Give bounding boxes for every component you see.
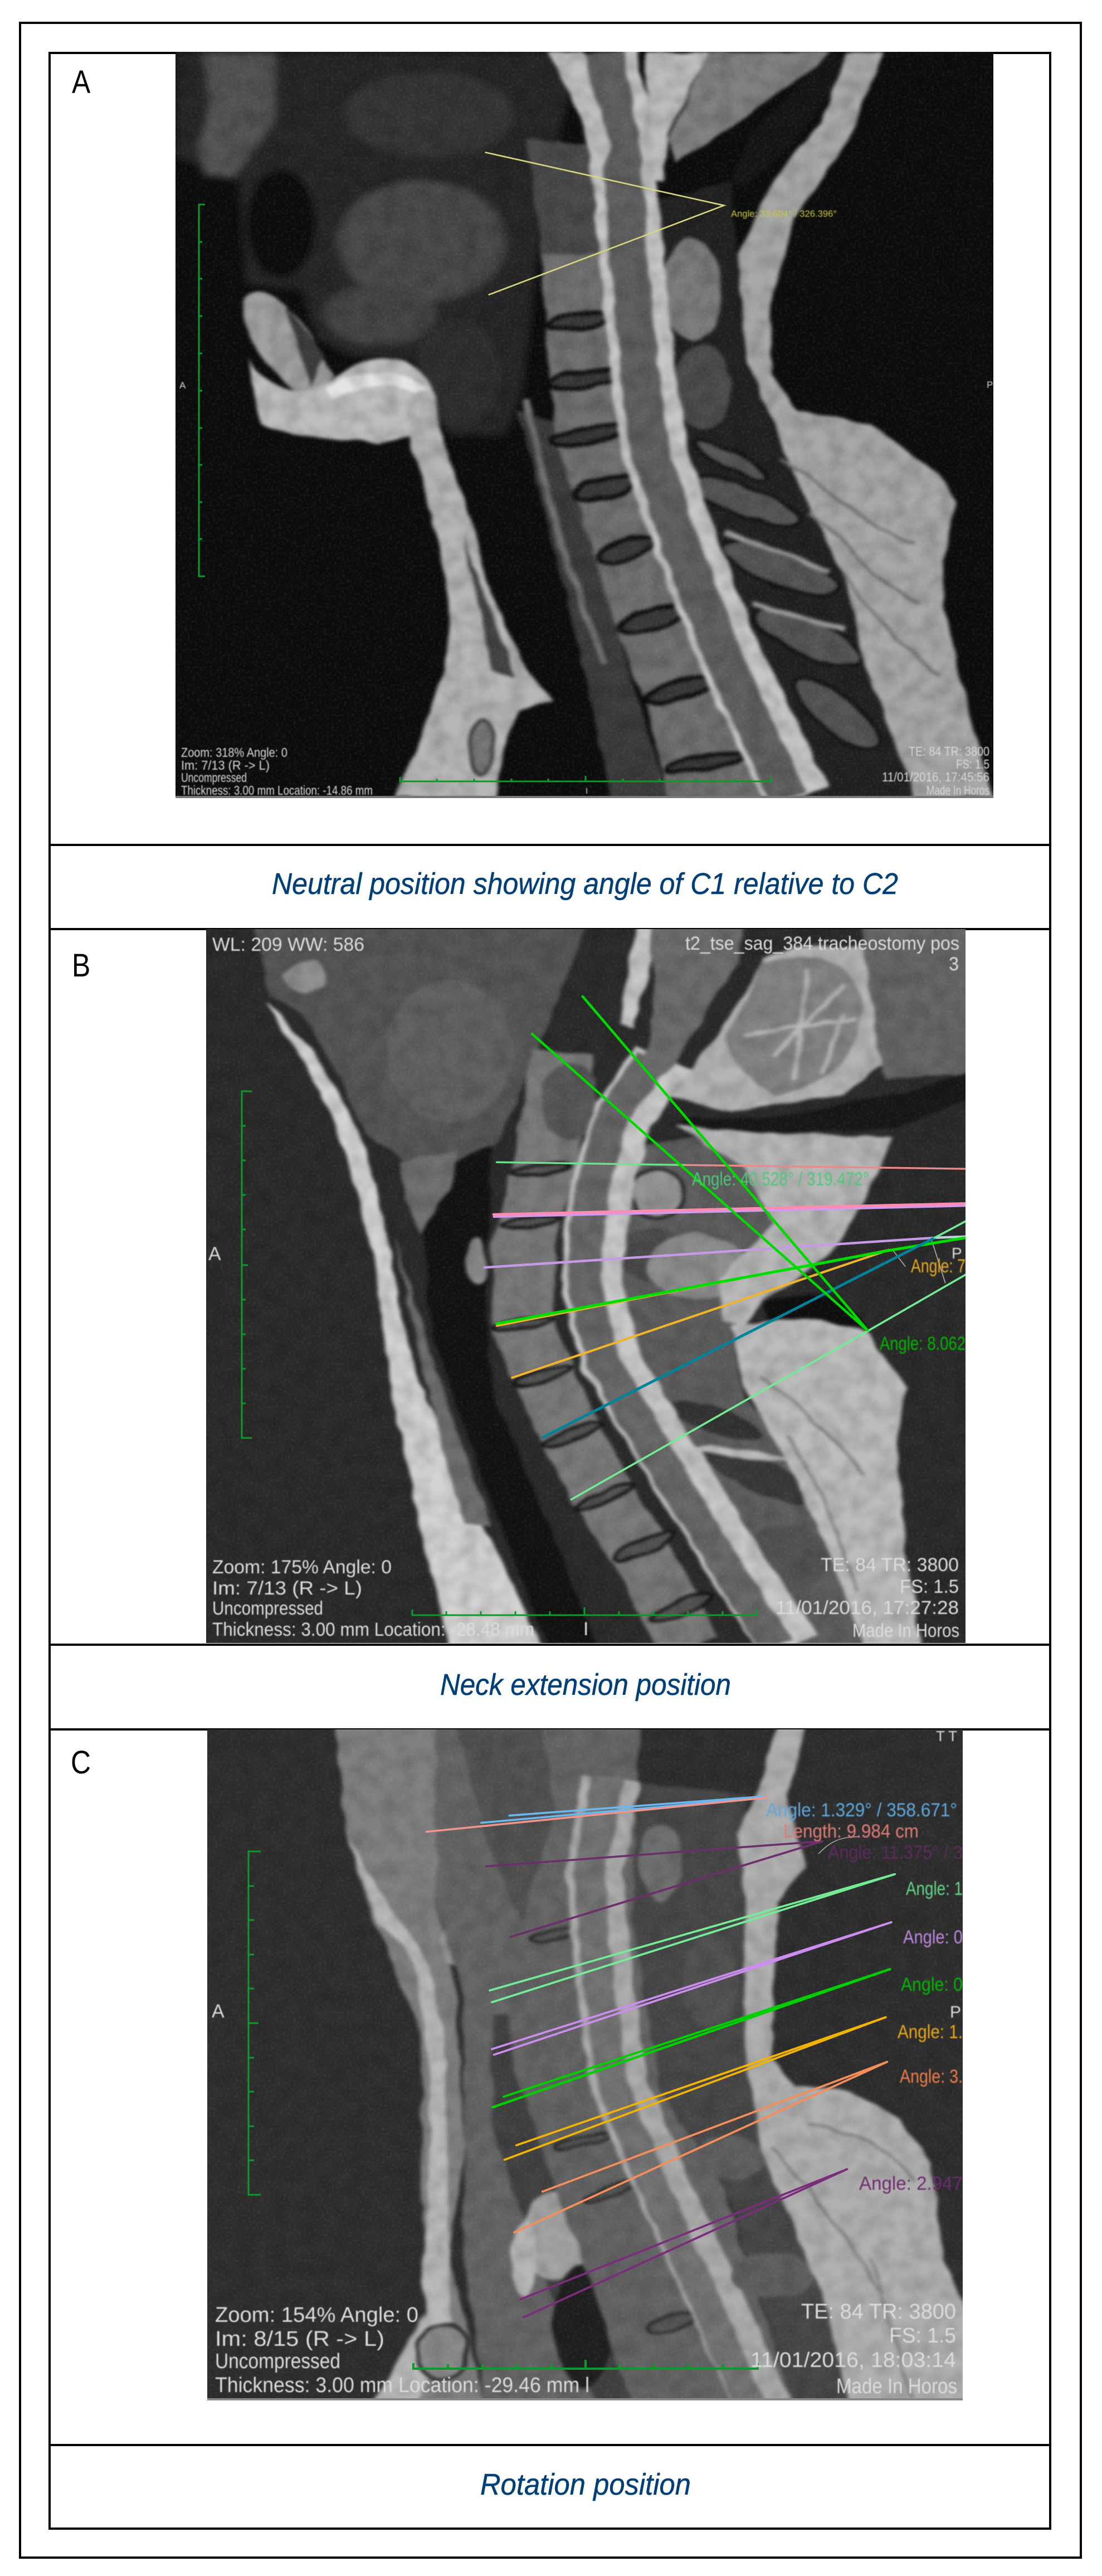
image annotations: 11/01/2016, 17:27:28 xyxy=(776,1597,959,1618)
vertebrae xyxy=(534,1923,667,2406)
image annotations: I xyxy=(583,1618,588,1640)
measurement lines xyxy=(427,1796,895,2317)
image annotations: Thickness: 3.00 mm Location: -29.46 mm l xyxy=(215,2374,589,2397)
image annotations: Im: 8/15 (R -> L) xyxy=(215,2327,384,2351)
nape fat xyxy=(738,52,993,798)
row divider: B / C xyxy=(48,1728,1049,1731)
image annotations: P xyxy=(987,380,993,390)
bottom scale bar xyxy=(400,776,771,781)
caption C: Rotation position xyxy=(480,2468,691,2501)
throat xyxy=(393,387,552,798)
nape fat xyxy=(675,1126,893,1327)
row divider: A / B xyxy=(48,928,1049,930)
image annotations: Uncompressed xyxy=(181,770,247,785)
posterior mottled tissue xyxy=(604,1129,871,1646)
MRI image A with angle overlay xyxy=(175,52,993,798)
image annotations: Zoom: 154% Angle: 0 xyxy=(215,2303,418,2327)
vertebral column xyxy=(527,139,766,798)
panel letter A: A xyxy=(72,64,90,100)
tongue and lips xyxy=(242,293,334,399)
MRI image C with angle overlay xyxy=(207,1729,963,2400)
image annotations: WL: 209 WW: 586 xyxy=(212,934,364,955)
image annotations xyxy=(212,1728,963,2398)
image annotations: TE: 84 TR: 3800 xyxy=(821,1554,959,1576)
panel A: neutral position xyxy=(72,52,993,901)
left scale bar xyxy=(199,205,205,576)
image annotations: Zoom: 175% Angle: 0 xyxy=(212,1557,392,1578)
image annotations xyxy=(179,208,993,798)
measurement lines xyxy=(485,997,966,1499)
MRI image B with angle overlay xyxy=(206,929,966,1643)
canal xyxy=(594,1778,763,2406)
image annotations: Uncompressed xyxy=(212,1598,323,1619)
image annotations: FS: 1.5 xyxy=(900,1576,959,1597)
image annotations: FS: 1.5 xyxy=(889,2324,956,2347)
panel letter C: C xyxy=(71,1744,91,1781)
row divider: B image / caption xyxy=(48,1644,1049,1646)
bottom scale bar xyxy=(412,1607,757,1615)
spinal canal xyxy=(592,1057,791,1646)
image annotations: TE: 84 TR: 3800 xyxy=(801,2300,956,2324)
left scale bar xyxy=(242,1091,252,1438)
angle lines xyxy=(485,152,724,295)
spinal canal xyxy=(604,52,798,798)
caption A: Neutral position showing angle of C1 relative to C2 xyxy=(272,867,898,901)
vertebral column xyxy=(524,1052,689,1646)
upper posterior bright and dark bands xyxy=(667,52,836,163)
row divider: A image / caption xyxy=(48,844,1049,846)
image annotations: P xyxy=(952,1245,962,1262)
nape fat xyxy=(738,1725,970,2406)
posterior tissue xyxy=(632,1783,906,2406)
image annotations: 3 xyxy=(949,954,959,975)
anterior bright band xyxy=(267,1002,541,1646)
panel letter B: B xyxy=(72,947,90,984)
image annotations: Thickness: 3.00 mm Location: -14.86 mm xyxy=(181,783,373,798)
image annotations xyxy=(208,933,966,1641)
panel C: rotation xyxy=(71,1729,963,2501)
image annotations: Uncompressed xyxy=(215,2350,340,2373)
image annotations: 11/01/2016, 18:03:14 xyxy=(750,2349,956,2372)
image annotations: Zoom: 318% Angle: 0 xyxy=(181,745,287,760)
image annotations: Im: 7/13 (R -> L) xyxy=(212,1578,362,1599)
caption B: Neck extension position xyxy=(440,1668,731,1702)
image annotations: Im: 7/13 (R -> L) xyxy=(181,758,270,772)
bottom scale bar xyxy=(413,2360,758,2369)
prevertebral tissue xyxy=(516,411,667,798)
image annotations: Thickness: 3.00 mm Location: -28.48 mm xyxy=(212,1619,534,1640)
image annotations: Length: 9.984 cm xyxy=(783,1821,919,1842)
image annotations: A xyxy=(208,1243,221,1265)
posterior tissue xyxy=(661,181,914,798)
image annotations: A xyxy=(212,2001,225,2022)
image annotations: P xyxy=(950,2003,961,2021)
image annotations: Angle: 2.947 xyxy=(859,2173,963,2194)
image annotations: Angle: 33.604° / 326.396° xyxy=(731,208,837,219)
dark airway band xyxy=(422,1145,597,1646)
image annotations: A xyxy=(179,380,186,391)
left scale bar xyxy=(248,1851,261,2195)
row divider: C image / caption xyxy=(48,2444,1049,2446)
image annotations: Angle: 40.528° / 319.472° xyxy=(692,1169,869,1190)
panel B: neck extension xyxy=(72,929,966,1702)
cerebellum region xyxy=(667,947,885,1112)
deep neck tissue xyxy=(436,1725,794,2406)
anterior neck xyxy=(338,1725,485,2406)
back of head tissue xyxy=(253,925,587,1173)
image annotations: I xyxy=(586,786,588,796)
